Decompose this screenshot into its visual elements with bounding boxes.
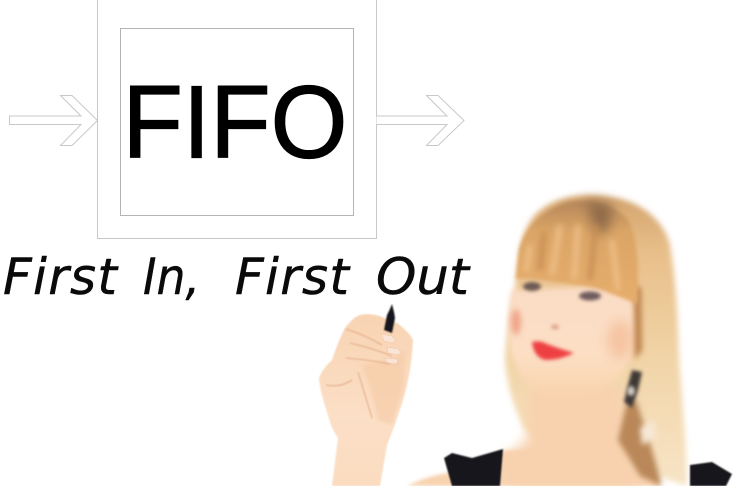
hand <box>319 314 413 486</box>
woman illustration <box>407 195 732 486</box>
bangs crown shadow <box>586 200 612 236</box>
nose shadow <box>551 324 559 330</box>
inner FIFO box <box>120 28 354 216</box>
marker <box>384 304 395 333</box>
eye: left <box>523 282 541 291</box>
hand holding marker <box>319 304 413 486</box>
bangs dark streaks <box>540 225 596 280</box>
face <box>508 285 636 399</box>
handwritten caption <box>3 248 471 306</box>
palm shadow <box>362 350 405 425</box>
hair edge beside face <box>634 285 642 360</box>
cheek blush: right <box>607 320 633 360</box>
handwritten caption: First <box>3 248 119 306</box>
arrow: input <box>10 96 98 146</box>
earring highlight <box>627 386 635 396</box>
earring <box>624 370 642 408</box>
fingernails <box>381 334 401 364</box>
outer process box <box>98 0 376 238</box>
handwritten caption: Out <box>376 248 471 306</box>
arrow: output <box>376 96 464 146</box>
dress strap: right <box>690 462 732 486</box>
blond lock highlight <box>640 420 656 445</box>
bangs light streaks <box>526 225 618 290</box>
neck <box>505 385 640 486</box>
handwritten caption: In, <box>143 248 200 306</box>
finger creases <box>326 329 392 418</box>
handwritten caption: First <box>235 248 351 306</box>
cheek blush: left <box>511 309 521 335</box>
bangs <box>516 201 638 304</box>
FIFO heading: FIFO <box>122 64 348 180</box>
chest and shoulders <box>407 450 660 486</box>
dress strap: left <box>444 449 503 486</box>
back hair <box>505 195 687 486</box>
lips <box>532 341 574 360</box>
shadowed hair behind neck <box>618 400 662 486</box>
eye: right <box>579 292 601 300</box>
